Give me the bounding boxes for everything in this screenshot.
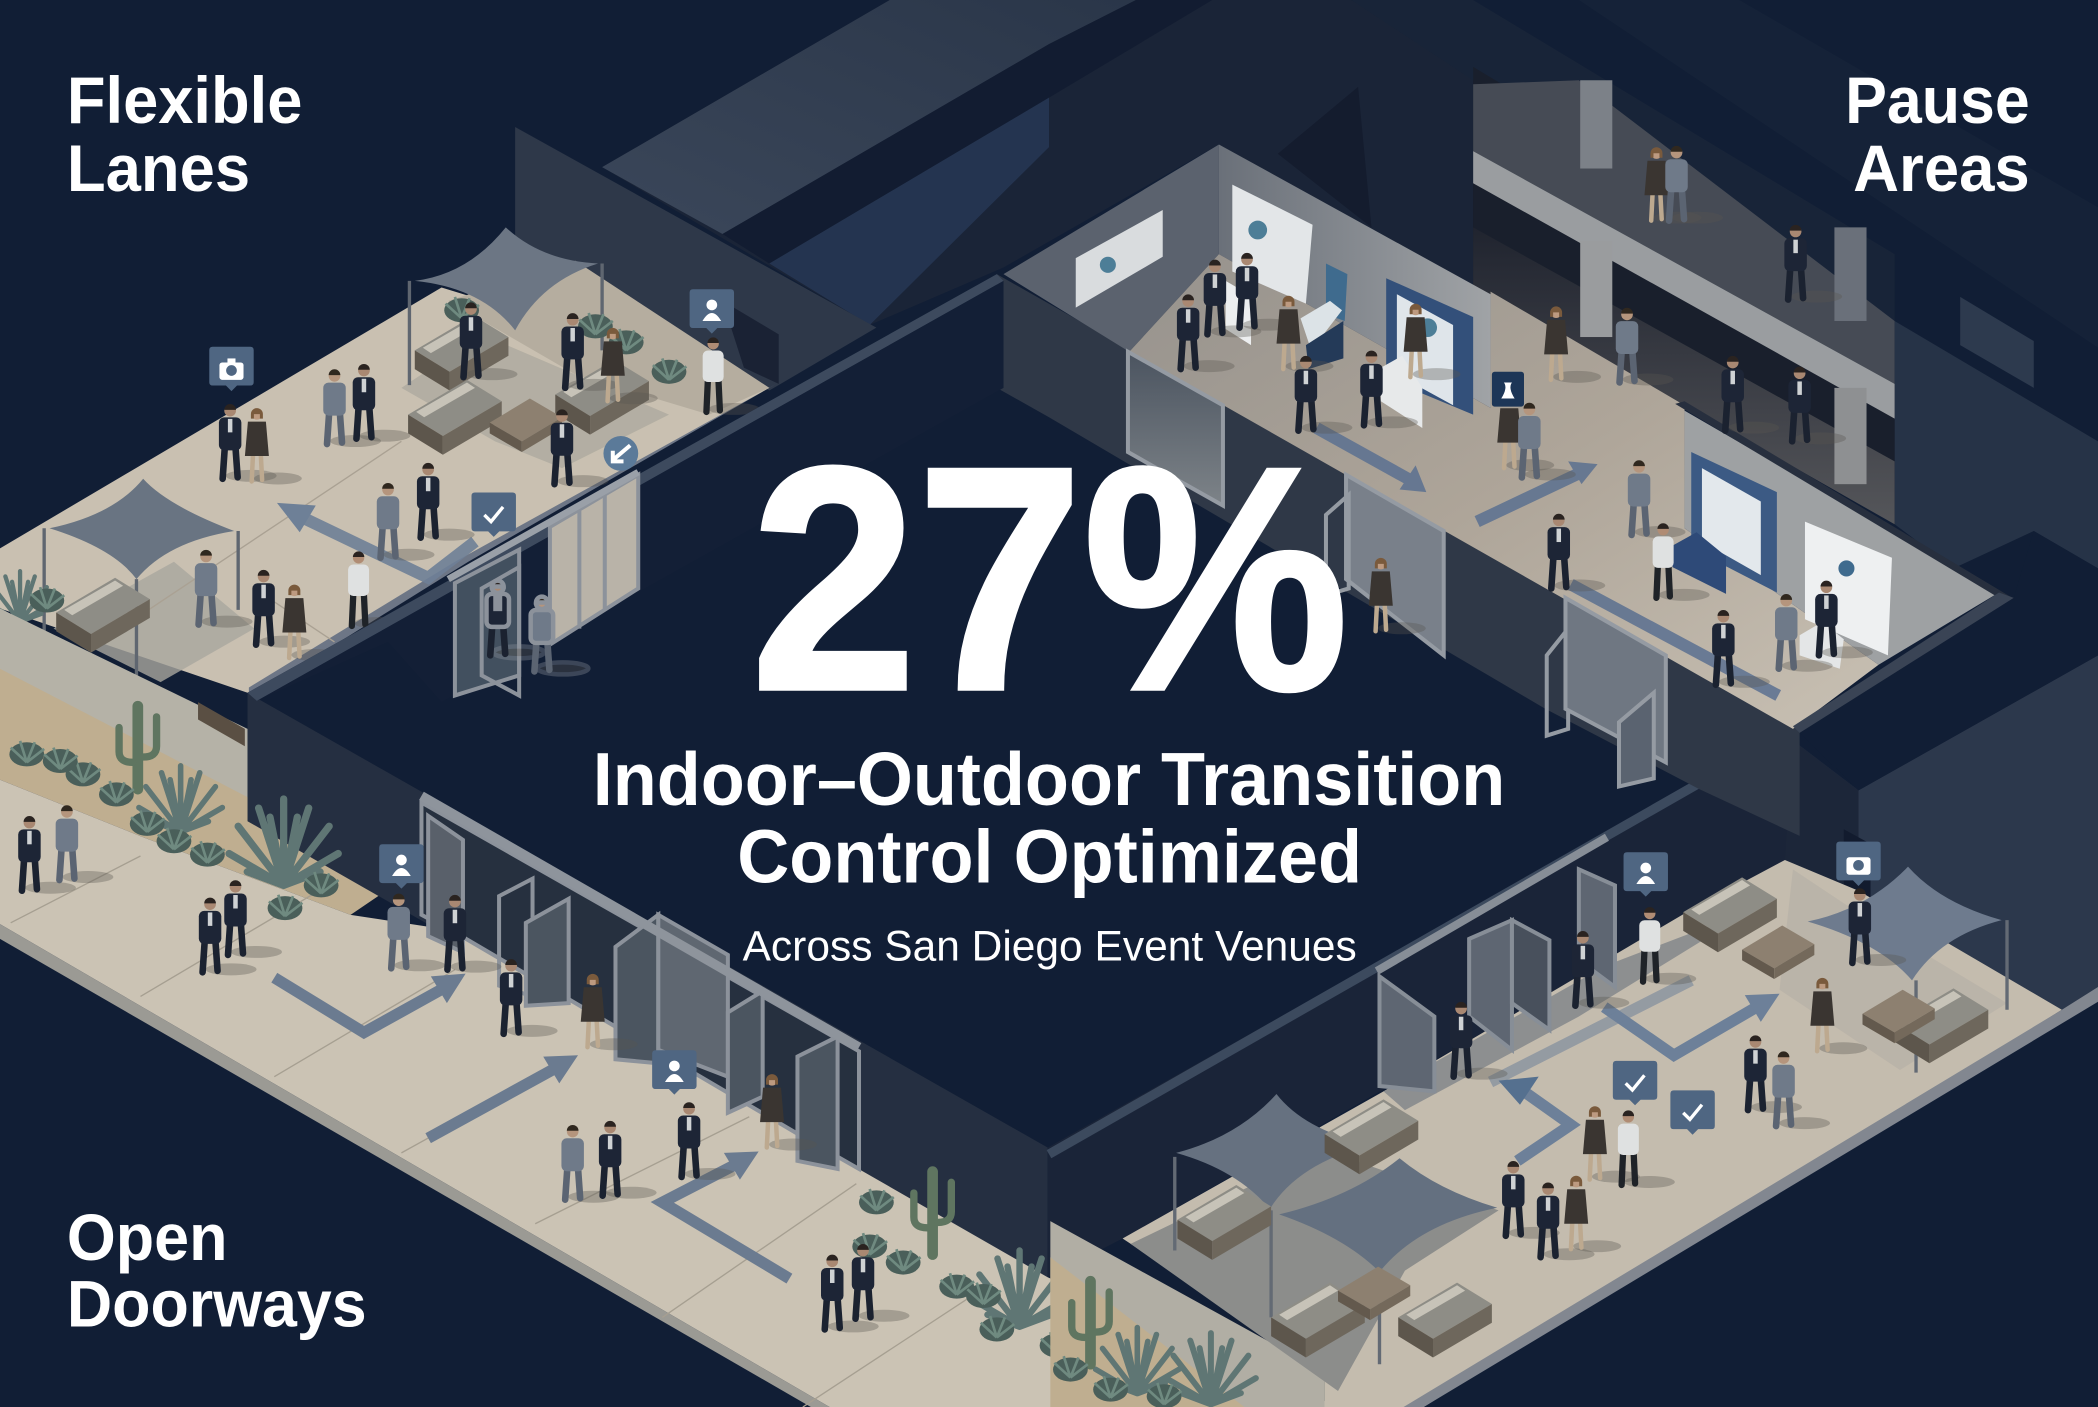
upper building roof structures [602,0,2098,348]
right planting [852,1172,1074,1358]
label: flexible lanes: Flexible [67,64,302,137]
label: flexible lanes: Lanes [67,132,250,205]
label: flexible lanes [67,64,302,205]
bottom terrace furniture [1177,877,1988,1358]
shade sails: bottom terrace [1175,867,2007,1364]
doors: hall front wall [1128,352,1666,786]
terrace planting [0,297,686,622]
low wall and gravel planting left [0,609,388,915]
people: terrace [195,302,760,661]
booth: blue frame three [1673,452,1777,594]
arrow: terrace lane [277,503,475,578]
terrace furniture [56,316,649,653]
icon: person pin terrace [690,289,734,334]
wall face: hall front [997,274,1800,836]
label: open doorways [67,1201,367,1341]
low wall and planting bottom [1050,1221,1325,1407]
wall display screen [1076,210,1163,308]
icon: check pin two [1670,1090,1715,1135]
right slate block [1785,297,2098,1010]
label: pause areas: Areas [1853,132,2030,205]
label: open doorways: Open [67,1201,227,1274]
icon: person pin walkway one [379,844,424,889]
icon: person pin walkway two [652,1050,697,1095]
icon: person pin bottom terrace [1624,852,1668,897]
heading line two: Control Optimized [737,815,1362,899]
shade sail: terrace upper [409,227,602,385]
people: bottom terrace [1450,888,1906,1260]
booth: white tower one [1226,185,1313,345]
booth: blue frame two [1381,278,1473,428]
icon: arrow badge terrace [603,436,638,471]
icon: camera pin left [209,347,254,391]
panel: flexible lanes terrace [0,227,779,698]
doors: terrace [448,472,638,695]
people: walkway [18,805,909,1332]
left building wall [515,127,876,391]
doors: bottom terrace [1377,837,1615,1091]
people: hall [1177,146,1873,688]
balcony columns [1580,80,1867,484]
panel: pause areas bottom terrace [1123,837,2098,1407]
label: open doorways: Doorways [67,1268,367,1341]
arrows: hall lanes [1317,428,1778,695]
person in doorway [1369,558,1426,634]
arrows: walkway lanes [274,974,789,1279]
shade sail: terrace lower [44,479,238,682]
label: pause areas [1845,64,2030,205]
kiosk and banner [1301,263,1347,369]
label: pause areas: Pause [1845,64,2030,137]
wall face: lower left [248,693,1048,1277]
arrows: bottom terrace lanes [1491,980,1780,1161]
stat: 27%: 27% [751,402,1349,757]
icon: check pin terrace [472,492,516,537]
icon: hall pin [1492,372,1524,407]
left planting [9,706,339,920]
doors: walkway frames [421,796,859,1169]
panel: open doorways walkway [0,706,1338,1407]
icon: check pin one [1613,1061,1657,1105]
wall face: lower right [1048,729,1793,1277]
subheading: Across San Diego Event Venues [743,922,1357,970]
wall rim: upper left [248,274,1004,702]
booth: white tower four [1800,522,1892,669]
central dark diamond floor [248,274,1800,1148]
heading line one: Indoor–Outdoor Transition [593,737,1505,821]
panel: hall with exhibitor booths [1004,67,2014,733]
icon: camera pin bottom terrace [1836,842,1881,886]
